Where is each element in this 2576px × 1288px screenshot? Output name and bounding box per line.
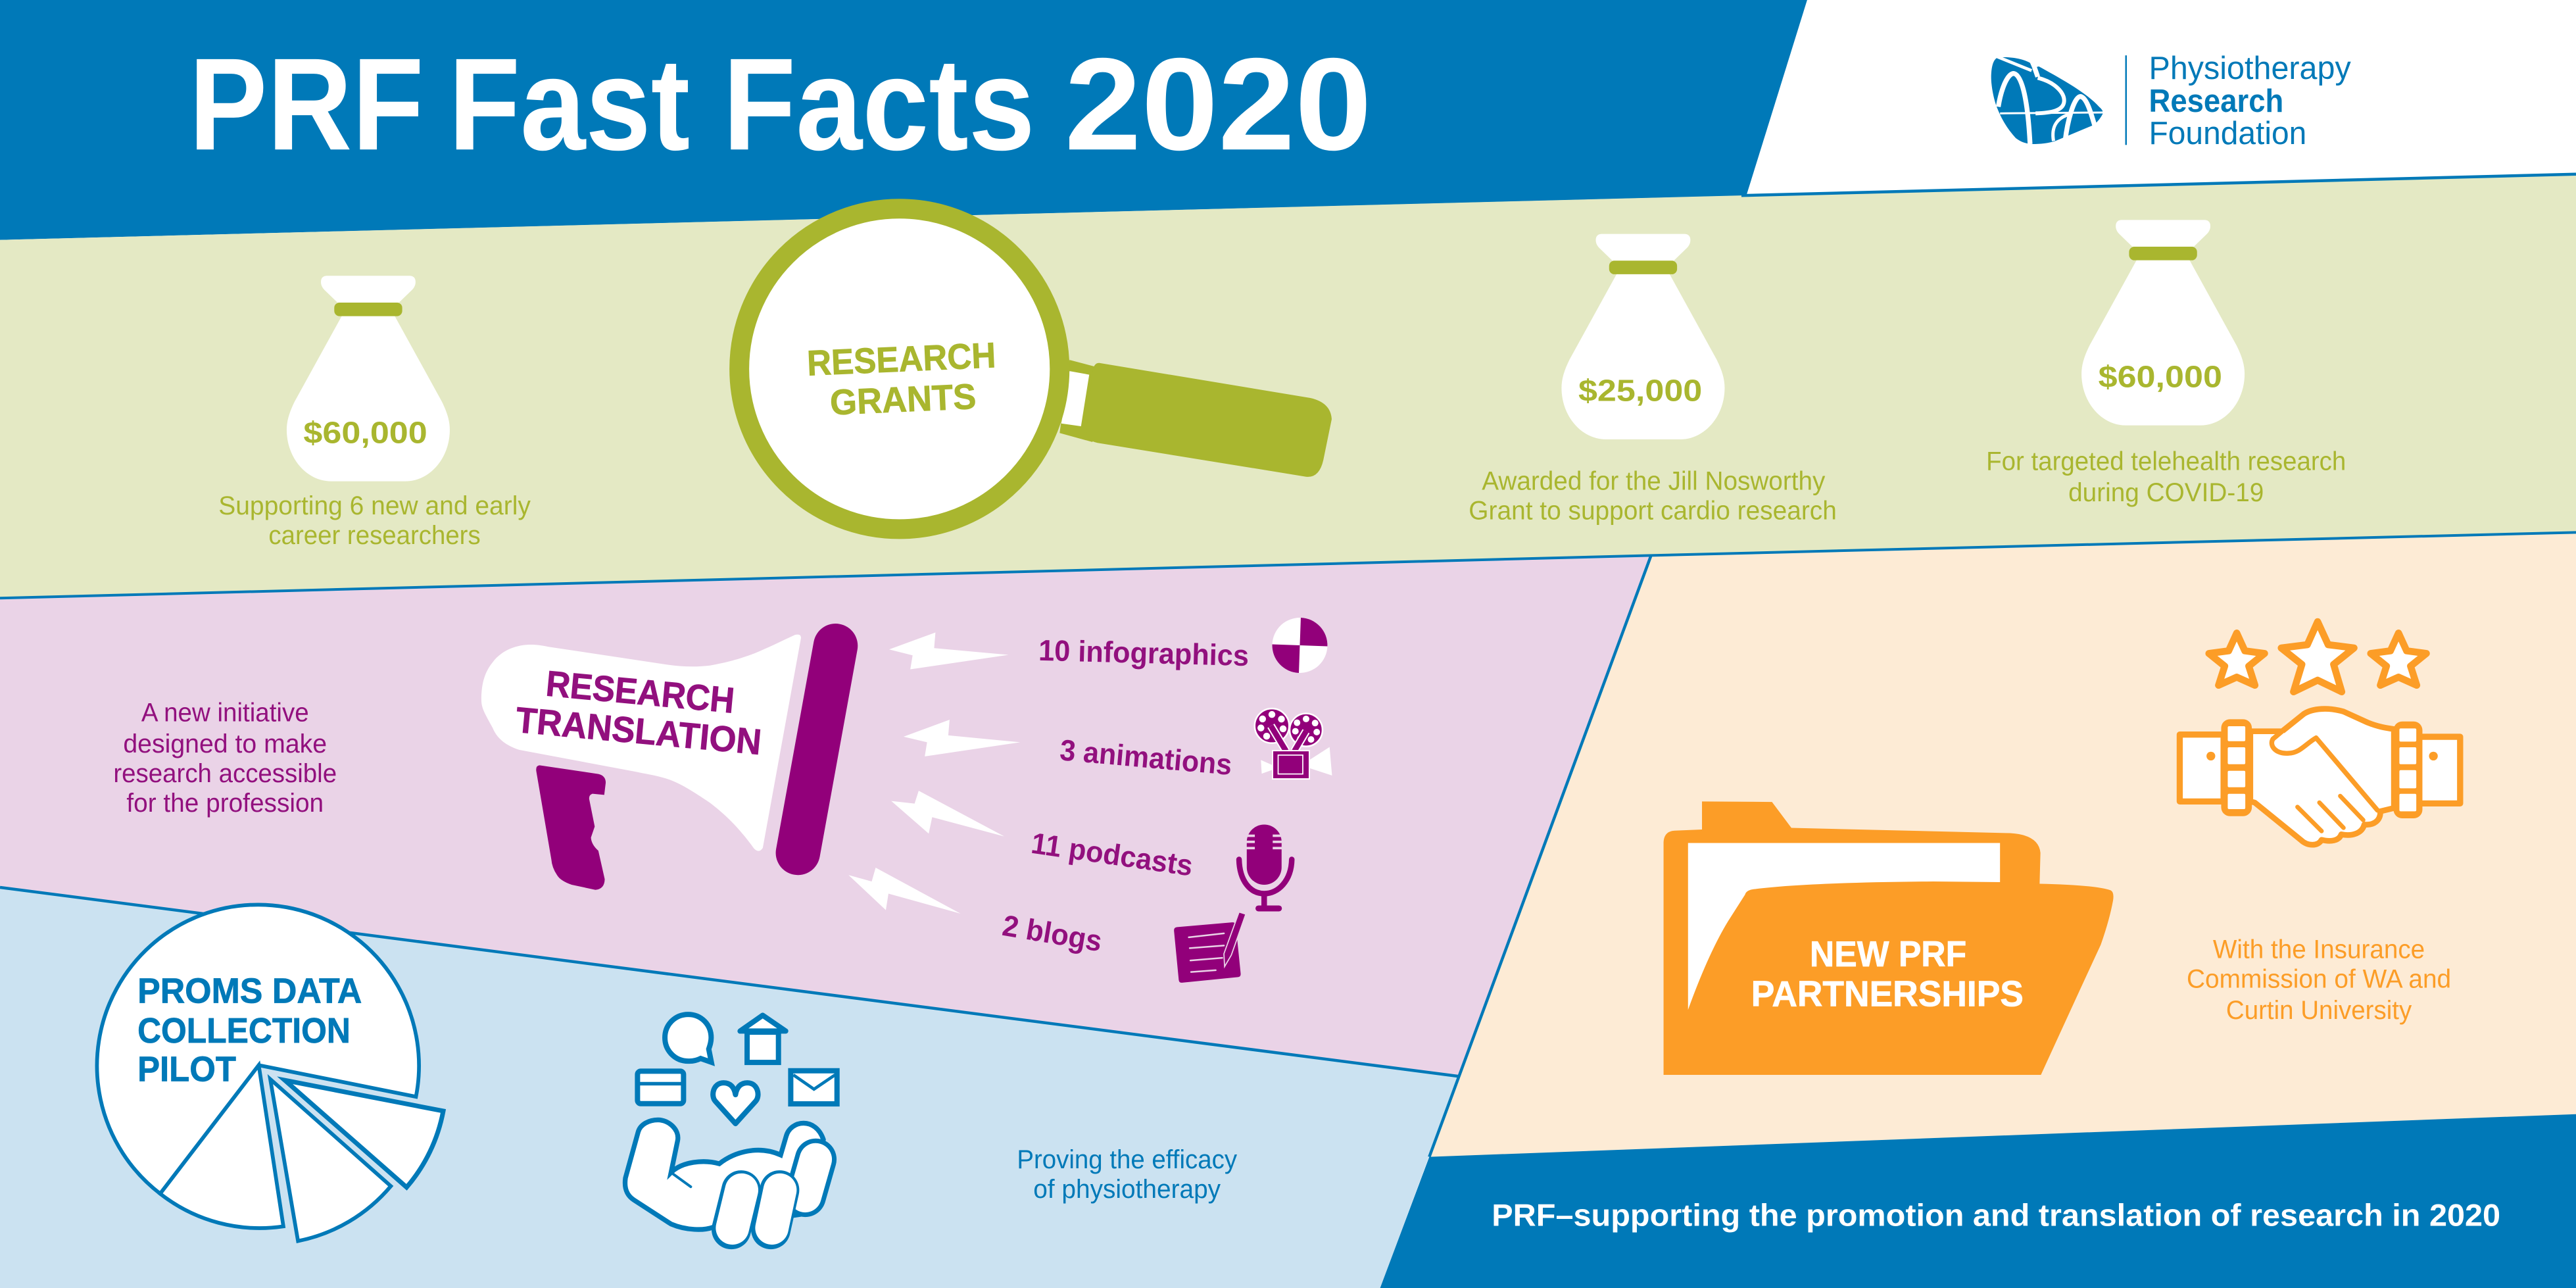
intro text: for the profession (126, 789, 324, 818)
caption: Jill Nosworthy grant: Awarded for the Jill Nosworthy (1482, 466, 1825, 495)
heading: new PRF partnerships: PARTNERSHIPS (1751, 973, 2024, 1014)
item: 2 blogs: 2 blogs (1000, 908, 1104, 958)
money bag: $25,000 (1561, 234, 1724, 439)
caption: proving the efficacy (1017, 1145, 1237, 1204)
footer text: PRF–supporting the promotion and translation of research in 2020 (1492, 1199, 2500, 1233)
heading: research translation (514, 663, 763, 762)
intro text (113, 699, 337, 818)
heading: new PRF partnerships (1751, 933, 2024, 1014)
title: Fast (449, 31, 690, 178)
heading: PROMS data collection pilot (137, 971, 362, 1089)
money bag: $60,000 telehealth (2081, 220, 2245, 426)
heading: PROMS data collection pilot: PROMS DATA (137, 971, 362, 1010)
caption: new and early career researchers: career researchers (268, 521, 481, 550)
icon: pie quadrants (1271, 617, 1328, 674)
caption: insurance commission and Curtin: Curtin University (2226, 996, 2412, 1025)
icon: open hand (625, 1120, 823, 1229)
item: 11 podcasts: 11 podcasts (1029, 826, 1195, 883)
logo wordmark: Physiotherapy (2149, 51, 2351, 86)
intro text: A new initiative (141, 699, 309, 728)
caption: telehealth research: during COVID-19 (2068, 478, 2264, 507)
icon: film camera (1255, 708, 1332, 779)
logo divider (2126, 55, 2127, 145)
money bag: $60,000 (287, 276, 450, 482)
heading: research translation: RESEARCH (545, 663, 736, 721)
caption: insurance commission and Curtin (2187, 935, 2451, 1025)
intro text: research accessible (113, 759, 337, 788)
title: Facts (723, 31, 1035, 178)
icon: card (637, 1071, 683, 1104)
caption: new and early career researchers: Supporting 6 new and early (218, 491, 531, 520)
logo wordmark: Foundation (2149, 116, 2306, 151)
title: 2020 (1065, 31, 1372, 178)
pie chart with heading (97, 904, 443, 1241)
logo mark (1991, 57, 2103, 144)
panel: PROMS data collection pilot (0, 887, 1459, 1288)
item: 10 infographics: 10 infographics (1038, 633, 1250, 672)
logo: Physiotherapy Research Foundation (1991, 51, 2351, 151)
icon: envelope (790, 1071, 837, 1104)
title (189, 31, 1372, 178)
money bag: $25,000: $25,000 (1578, 374, 1702, 408)
heading: research translation: TRANSLATION (514, 699, 763, 762)
caption: proving the efficacy: of physiotherapy (1033, 1175, 1221, 1204)
icon: chat bubble (665, 1014, 712, 1062)
folder with heading (1664, 801, 2114, 1075)
panel: new PRF partnerships (1429, 532, 2576, 1157)
caption: insurance commission and Curtin: Commission of WA and (2187, 964, 2451, 993)
caption: new and early career researchers (218, 491, 531, 550)
logo wordmark (2149, 51, 2351, 151)
title: PRF (189, 31, 424, 178)
icon: notepad and pencil (1174, 912, 1246, 983)
caption: telehealth research (1986, 447, 2346, 507)
caption: proving the efficacy: Proving the efficacy (1017, 1145, 1237, 1174)
heading: PROMS data collection pilot: PILOT (137, 1049, 236, 1089)
money bag: $60,000: $60,000 (303, 415, 427, 449)
icon: house (740, 1015, 786, 1062)
footer band (1380, 1114, 2576, 1288)
panel: research translation (0, 555, 1651, 1076)
intro text: designed to make (123, 730, 327, 758)
sound bolts (848, 633, 1020, 914)
heading: research grants (806, 335, 996, 423)
icon: three stars (2209, 622, 2426, 692)
panel: research grants (0, 174, 2576, 598)
heading: research grants: RESEARCH (806, 335, 996, 384)
megaphone (481, 635, 836, 890)
icon: microphone (1239, 825, 1292, 908)
icon: heart (713, 1083, 758, 1124)
magnifying glass with heading (739, 209, 1332, 529)
icon: handshake (2179, 709, 2460, 845)
item: 3 animations: 3 animations (1059, 733, 1233, 781)
caption: insurance commission and Curtin: With the Insurance (2213, 935, 2425, 964)
heading: PROMS data collection pilot: COLLECTION (137, 1011, 351, 1051)
money bag: $60,000 telehealth: $60,000 (2099, 359, 2222, 393)
icon: hand holding symbols (625, 1014, 837, 1229)
caption: telehealth research: For targeted telehealth research (1986, 447, 2346, 476)
caption: Jill Nosworthy grant: Grant to support cardio research (1469, 496, 1837, 525)
heading: research grants: GRANTS (829, 376, 977, 423)
heading: new PRF partnerships: NEW PRF (1810, 933, 1966, 974)
logo wordmark: Research (2149, 84, 2283, 119)
caption: Jill Nosworthy grant (1469, 466, 1837, 525)
